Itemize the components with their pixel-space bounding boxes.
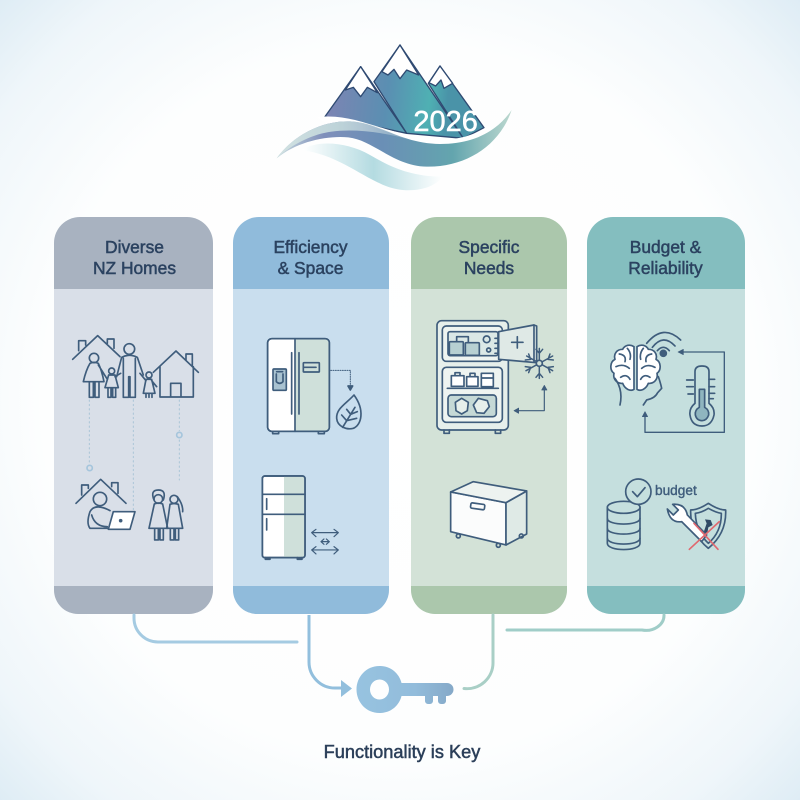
connector: Diverse NZ Homes bbox=[134, 615, 297, 642]
icon: family and houses bbox=[73, 336, 198, 540]
heading: Needs bbox=[464, 258, 514, 278]
panel: Diverse NZ Homes bbox=[54, 217, 213, 614]
connector: Budget & Reliability bbox=[507, 615, 664, 630]
connector arrow: Efficiency & Space to key bbox=[309, 615, 352, 697]
heading: Reliability bbox=[628, 258, 703, 278]
heading: NZ Homes bbox=[93, 258, 176, 278]
icon: wrench and shield with red cross bbox=[667, 503, 726, 549]
icon: side-by-side fridge and leaf bbox=[268, 339, 361, 434]
panel: Efficiency & Space bbox=[233, 217, 389, 614]
year 2026: 2026 bbox=[413, 106, 478, 138]
heading: & Space bbox=[278, 258, 343, 278]
panel: Specific Needs bbox=[411, 217, 567, 614]
icon: key bbox=[356, 666, 454, 713]
panel: Budget & Reliability bbox=[587, 217, 745, 614]
connector: Specific Needs bbox=[464, 615, 493, 689]
budget label: budget bbox=[655, 483, 697, 498]
white sweep under mountains bbox=[317, 116, 493, 150]
light upper wave bbox=[277, 121, 408, 158]
lower pale wave bbox=[302, 144, 443, 190]
logo: mountains and waves with 2026 bbox=[277, 45, 512, 190]
icon: brain, wifi and thermometer bbox=[611, 332, 724, 432]
icon: fridge-freezer with open door and snowflake bbox=[437, 321, 553, 433]
icon: chest freezer bbox=[451, 482, 527, 547]
icon: top-freezer fridge with width arrows bbox=[262, 476, 338, 559]
heading: Specific bbox=[459, 237, 519, 257]
icon: budget database with check bbox=[607, 479, 697, 550]
mountain peaks bbox=[325, 45, 484, 138]
heading: Efficiency bbox=[273, 237, 348, 257]
heading: Diverse bbox=[105, 237, 164, 257]
caption: Functionality is Key: Functionality is Key bbox=[324, 742, 481, 762]
wave band bbox=[277, 110, 512, 167]
heading: Budget & bbox=[630, 237, 701, 257]
